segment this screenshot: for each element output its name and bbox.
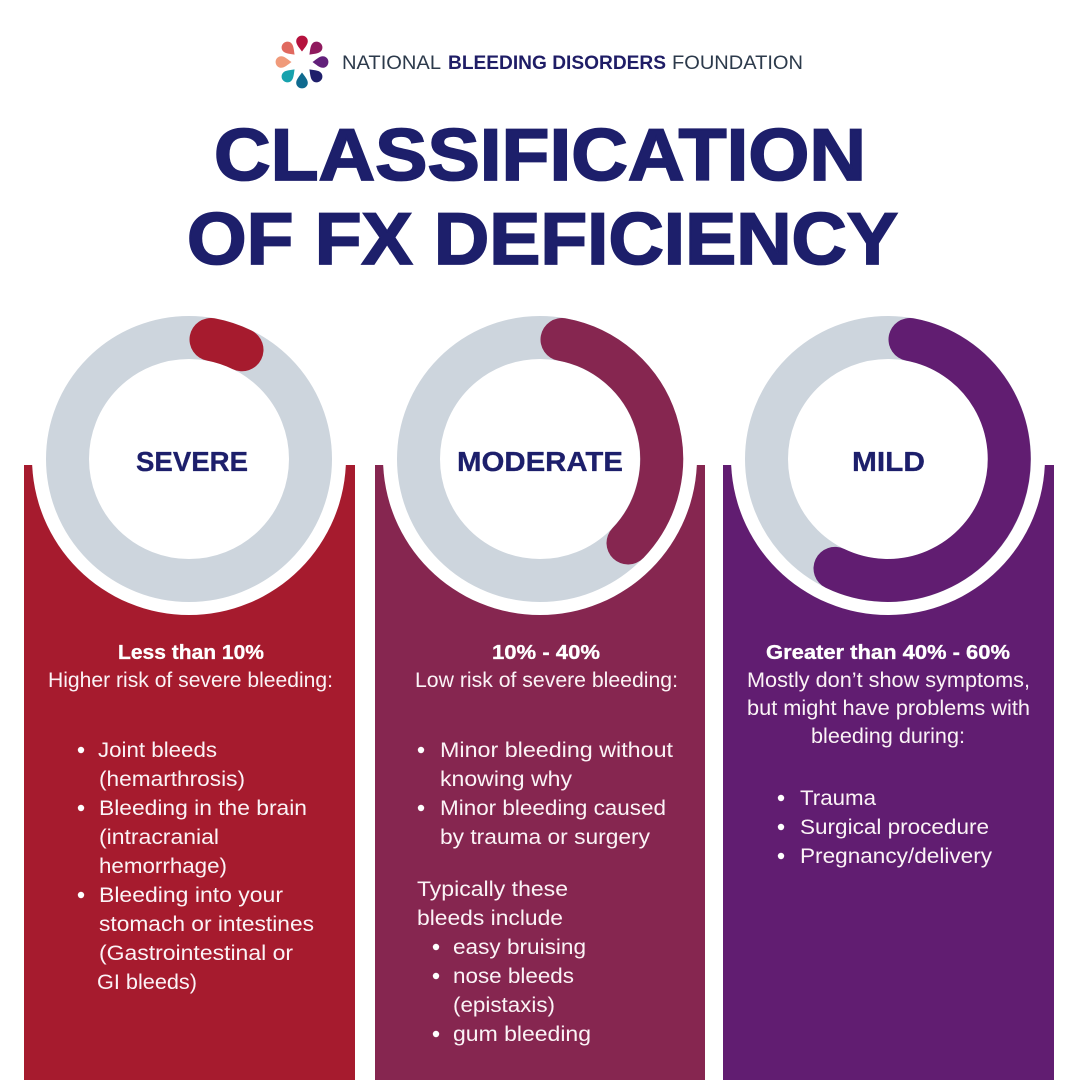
moderate typical bleeds list: gum bleeding [453, 1023, 591, 1046]
title: CLASSIFICATION [214, 115, 866, 196]
severe symptom list: (intracranial [99, 826, 219, 849]
moderate typical bleeds list: bleeds include [417, 907, 563, 930]
donut chart: severe, under 10% [68, 338, 310, 580]
mild description: Greater than 40% - 60% [766, 642, 1010, 664]
moderate symptom list: by trauma or surgery [440, 826, 651, 849]
moderate description [415, 642, 678, 692]
donut chart: severe, under 10%: SEVERE [136, 446, 248, 477]
panel: severe [24, 301, 355, 1080]
severe description: Less than 10% [118, 642, 264, 664]
logo wordmark: NATIONAL [342, 52, 441, 74]
title: OF FX DEFICIENCY [187, 199, 898, 280]
mild symptom list: Pregnancy/delivery [800, 845, 993, 868]
severe symptom list: hemorrhage) [99, 855, 227, 878]
donut chart: moderate, 10% to 40%: MODERATE [457, 446, 623, 477]
mild symptom list [778, 787, 993, 868]
moderate typical bleeds list [417, 878, 591, 1046]
mild description: bleeding during: [811, 725, 965, 748]
donut chart: mild, greater than 40% to 60% [766, 338, 1010, 580]
mild symptom list: Trauma [800, 787, 876, 810]
moderate symptom list: Minor bleeding without [440, 739, 673, 762]
logo wordmark [342, 52, 803, 74]
moderate typical bleeds list: easy bruising [453, 936, 586, 959]
severe symptom list: Bleeding into your [99, 884, 283, 907]
panel: moderate [375, 301, 705, 1080]
mild description [747, 642, 1030, 748]
moderate typical bleeds list: Typically these [417, 878, 568, 901]
severe description [48, 642, 333, 692]
moderate description: 10% - 40% [492, 642, 600, 664]
logo wordmark: FOUNDATION [672, 52, 803, 74]
moderate typical bleeds list: (epistaxis) [453, 994, 555, 1017]
mild description: but might have problems with [747, 697, 1030, 720]
logo wordmark: BLEEDING DISORDERS [448, 52, 666, 74]
title [187, 115, 898, 280]
moderate typical bleeds list: nose bleeds [453, 965, 574, 988]
moderate symptom list: Minor bleeding caused [440, 797, 666, 820]
panel: mild [723, 301, 1054, 1080]
severe description: Higher risk of severe bleeding: [48, 669, 333, 692]
severe symptom list: Bleeding in the brain [99, 797, 307, 820]
icon: eight-petal logo mark [276, 36, 328, 88]
donut chart: moderate, 10% to 40% [418, 338, 662, 580]
moderate symptom list [418, 739, 673, 849]
severe symptom list: (hemarthrosis) [99, 768, 245, 791]
severe symptom list: Joint bleeds [98, 739, 217, 762]
severe symptom list: stomach or intestines [99, 913, 314, 936]
severe symptom list: (Gastrointestinal or [99, 942, 293, 965]
severe symptom list [78, 739, 314, 994]
moderate description: Low risk of severe bleeding: [415, 669, 678, 692]
mild description: Mostly don’t show symptoms, [747, 669, 1030, 692]
donut chart: mild, greater than 40% to 60%: MILD [852, 446, 925, 477]
mild symptom list: Surgical procedure [800, 816, 989, 839]
logo: National Bleeding Disorders Foundation [276, 36, 803, 88]
moderate symptom list: knowing why [440, 768, 573, 791]
severe symptom list: GI bleeds) [97, 971, 197, 994]
